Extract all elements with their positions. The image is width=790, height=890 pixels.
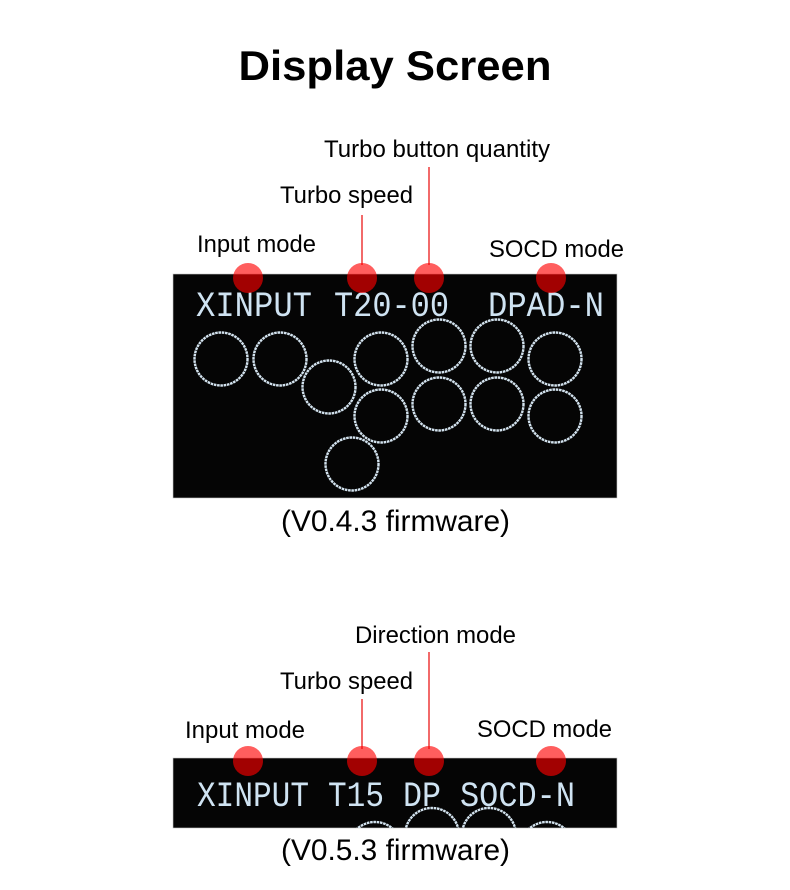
screen status text: DPAD-N: [488, 287, 604, 327]
leader lines, second screen: [362, 652, 429, 749]
title: Display Screen: [238, 42, 552, 89]
screen background: [173, 274, 617, 498]
screen status text: T20-00: [334, 287, 449, 327]
marker dots, second screen: [233, 746, 566, 776]
label: Turbo button quantity: Turbo button quantity: [324, 136, 550, 163]
caption: V0.4.3 firmware: (V0.4.3 firmware): [281, 505, 510, 538]
button layout circles: [194, 320, 582, 490]
clipped button circles: [356, 806, 566, 828]
screen status text: T15: [328, 777, 384, 817]
marker dots, first screen: [233, 263, 566, 293]
label: Input mode: Input mode: [185, 717, 305, 744]
screen status text: [196, 287, 604, 327]
label: SOCD mode: SOCD mode: [477, 716, 612, 743]
caption: V0.5.3 firmware: (V0.5.3 firmware): [281, 834, 510, 867]
screen status text: XINPUT: [196, 287, 312, 327]
panel: V0.4.3 firmware screen: [173, 274, 617, 498]
label: SOCD mode: SOCD mode: [489, 236, 624, 263]
label: Direction mode: Direction mode: [355, 622, 516, 649]
screen status text: DP: [403, 777, 441, 817]
panel: V0.5.3 firmware screen: [172, 758, 618, 828]
label: Input mode: Input mode: [197, 231, 316, 258]
screen background: [173, 758, 617, 828]
label: Turbo speed: Turbo speed: [280, 668, 413, 695]
screen status text: XINPUT: [197, 777, 309, 817]
leader lines, first screen: [362, 167, 429, 265]
label: Turbo speed: Turbo speed: [280, 182, 413, 209]
screen status text: [197, 777, 575, 817]
screen status text: SOCD-N: [460, 777, 575, 817]
